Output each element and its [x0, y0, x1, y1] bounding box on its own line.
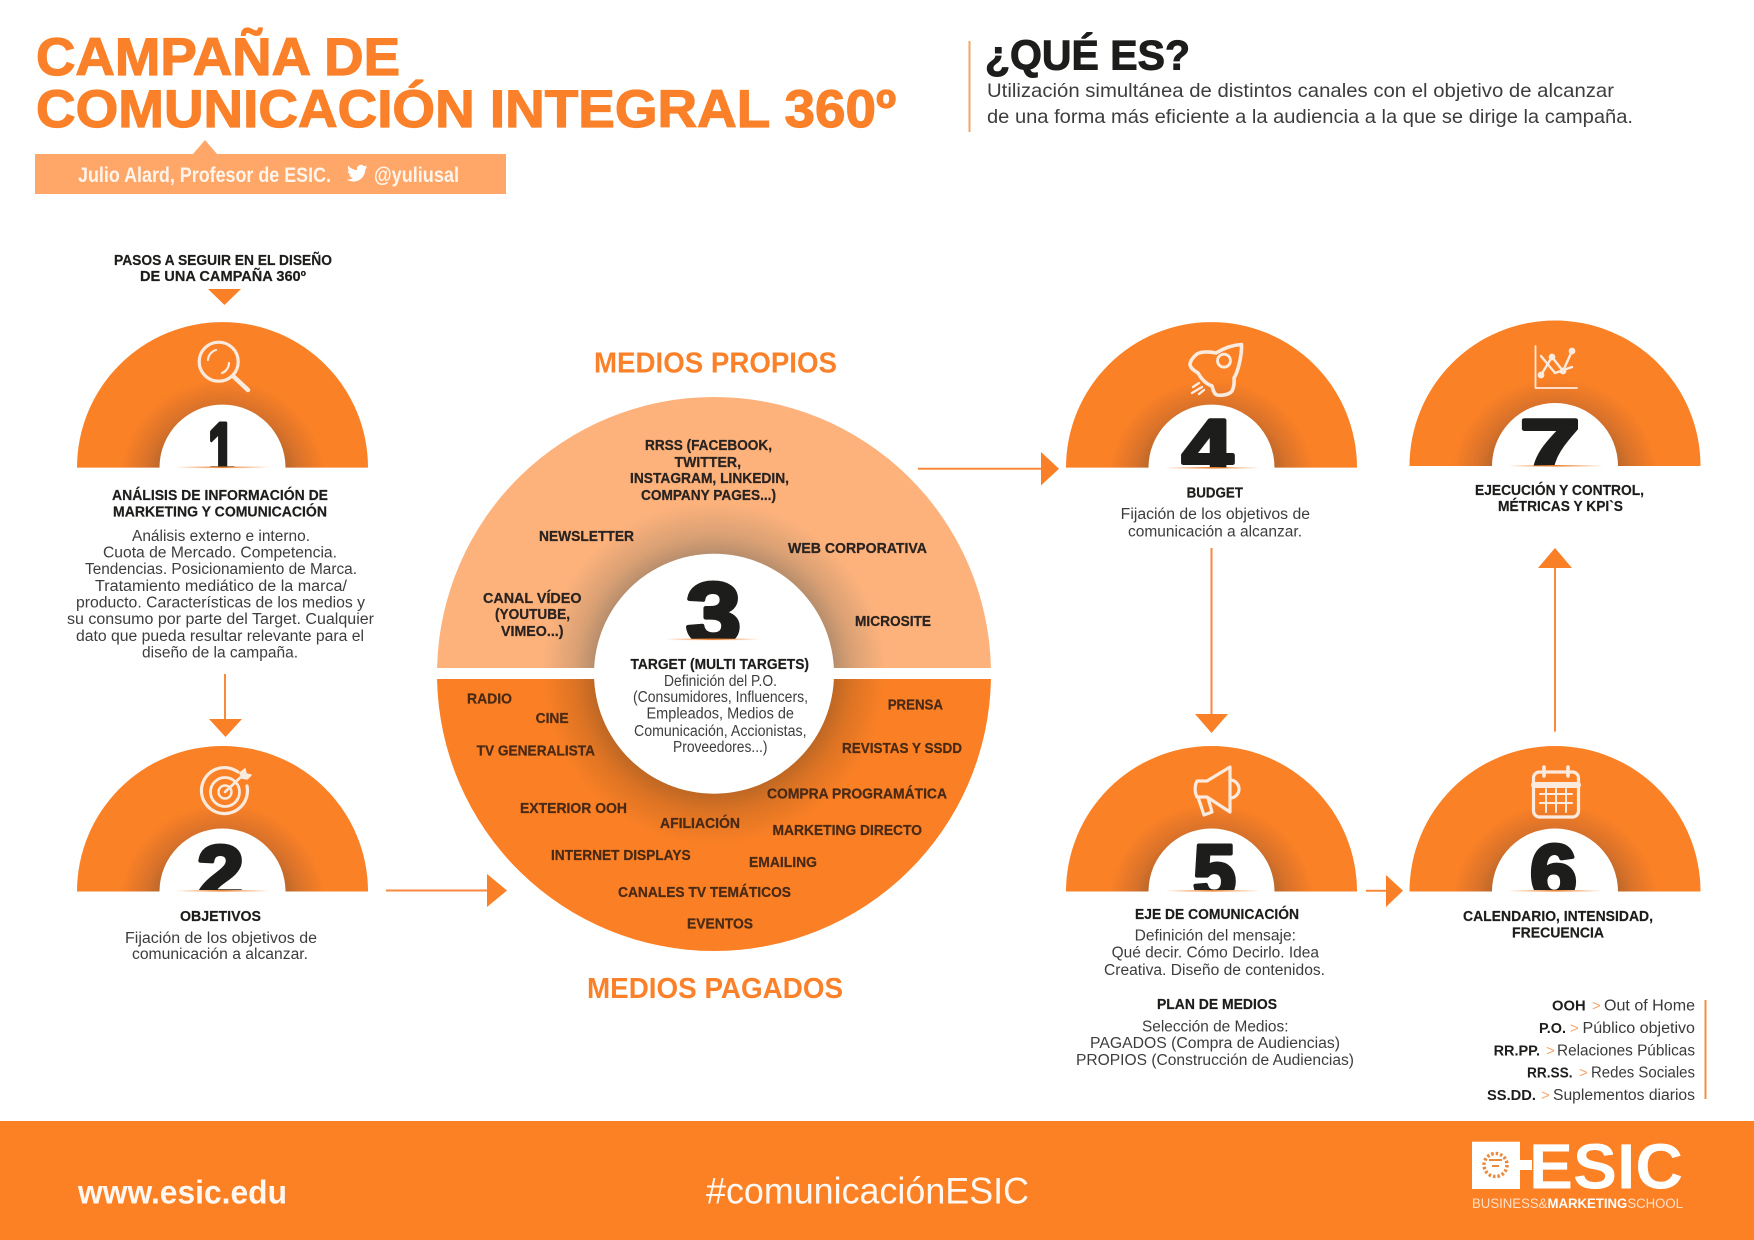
- arch 5: [1066, 746, 1357, 892]
- footer band: [0, 1121, 1754, 1240]
- body 3: Definición del P.O.: [664, 673, 777, 690]
- arch 7: [1410, 320, 1700, 466]
- arch 1: [77, 322, 368, 468]
- glossary legend: P.O.: [1539, 1020, 1566, 1037]
- heading 1: MARKETING Y COMUNICACIÓN: [113, 503, 327, 521]
- icon: line chart: [1536, 346, 1577, 388]
- body 3: Proveedores...): [673, 739, 768, 756]
- heading 2: OBJETIVOS: [180, 909, 261, 925]
- icon: rocket: [1190, 344, 1242, 395]
- hashtag: #comunicaciónESIC: [706, 1171, 1029, 1212]
- step 7: [1410, 320, 1700, 515]
- paid media labels: COMPRA PROGRAMÁTICA: [767, 786, 947, 803]
- paid media labels: EMAILING: [749, 855, 817, 871]
- paid media labels: EXTERIOR OOH: [520, 801, 627, 817]
- icon: megaphone: [1195, 767, 1239, 815]
- arrow 6 to 7: [1538, 548, 1572, 732]
- owned media labels: (YOUTUBE,: [495, 607, 570, 623]
- label: medios pagados: MEDIOS PAGADOS: [587, 973, 843, 1005]
- body 1: Cuota de Mercado. Competencia.: [103, 544, 337, 562]
- arch 4: [1066, 322, 1357, 468]
- arrowhead down: [208, 289, 241, 305]
- owned media labels: INSTAGRAM, LINKEDIN,: [630, 471, 789, 487]
- owned media labels: WEB CORPORATIVA: [788, 541, 928, 557]
- heading 3: TARGET (MULTI TARGETS): [630, 657, 809, 673]
- author banner: Julio Alard, Profesor de ESIC.: [78, 164, 331, 187]
- body 4: [1121, 506, 1310, 541]
- heading 7: EJECUCIÓN Y CONTROL,: [1475, 481, 1644, 499]
- owned media labels: COMPANY PAGES...): [641, 488, 776, 504]
- paid media labels: [467, 692, 962, 933]
- body 2: Fijación de los objetivos de: [125, 930, 317, 947]
- body 1: producto. Características de los medios y: [76, 594, 365, 612]
- main title: [36, 27, 896, 139]
- paid media labels: EVENTOS: [687, 917, 753, 933]
- number 6: 6: [1530, 828, 1577, 916]
- heading 5: EJE DE COMUNICACIÓN: [1135, 905, 1299, 923]
- body 3: [633, 673, 808, 756]
- arrow 2 to 3: [386, 874, 507, 907]
- body 4: comunicación a alcanzar.: [1128, 524, 1302, 541]
- glossary legend: RR.SS.: [1527, 1065, 1573, 1082]
- paid media labels: PRENSA: [888, 698, 943, 714]
- glossary legend: Suplementos diarios: [1553, 1087, 1695, 1104]
- icon: calendar: [1534, 767, 1578, 817]
- number 2: 2: [197, 829, 244, 917]
- body 1: Análisis externo e interno.: [132, 528, 310, 545]
- paid media labels: AFILIACIÓN: [660, 814, 740, 832]
- heading 1: ANÁLISIS DE INFORMACIÓN DE: [112, 486, 328, 504]
- glossary legend: [1487, 998, 1706, 1104]
- heading: qué es: ¿QUÉ ES?: [985, 32, 1190, 78]
- owned media labels: VIMEO...): [501, 624, 564, 640]
- heading 7: [1475, 481, 1644, 515]
- emblem: laurel wreath: [1484, 1154, 1507, 1176]
- icon: target: [201, 768, 251, 814]
- body 5: [1104, 928, 1325, 979]
- arrow 5 to 6: [1366, 875, 1403, 907]
- arch 6: [1410, 746, 1700, 892]
- body 1: diseño de la campaña.: [142, 644, 298, 662]
- number 5: 5: [1193, 828, 1236, 916]
- step 5: [1066, 746, 1357, 1069]
- body 5: Creativa. Diseño de contenidos.: [1104, 962, 1325, 979]
- author banner: [35, 140, 506, 194]
- glossary legend: >: [1546, 1043, 1555, 1060]
- body 1: Tratamiento mediático de la marca/: [95, 578, 348, 595]
- center circle: target: [594, 554, 834, 794]
- body 4: Fijación de los objetivos de: [1121, 506, 1310, 523]
- arrow 4 to 5: [1195, 548, 1228, 733]
- step 4: [1066, 322, 1357, 541]
- owned media labels: CANAL VÍDEO: [483, 590, 582, 607]
- paid media labels: RADIO: [467, 692, 512, 708]
- number 1: 1: [208, 408, 235, 493]
- number 7: 7: [1520, 403, 1580, 491]
- definition text: [987, 80, 1633, 128]
- icon: twitter bird: [347, 165, 367, 181]
- label: medios propios: MEDIOS PROPIOS: [594, 348, 837, 380]
- steps intro: DE UNA CAMPAÑA 360º: [140, 267, 307, 285]
- body 1: Tendencias. Posicionamiento de Marca.: [85, 561, 357, 578]
- definition block: qué es: [968, 32, 1633, 132]
- author banner: @yuliusal: [374, 164, 459, 187]
- body 1: dato que pueda resultar relevante para el: [76, 628, 364, 645]
- body 2: comunicación a alcanzar.: [132, 946, 308, 963]
- body 1: su consumo por parte del Target. Cualquier: [67, 611, 374, 628]
- body 1: [67, 528, 374, 662]
- body 3: Empleados, Medios de: [646, 706, 794, 723]
- paid media labels: CANALES TV TEMÁTICOS: [618, 884, 791, 901]
- logo: esic: BUSINESS&MARKETINGSCHOOL: [1472, 1196, 1683, 1211]
- owned media labels: NEWSLETTER: [539, 529, 634, 545]
- main title: CAMPAÑA DE: [36, 27, 400, 87]
- heading 7: MÉTRICAS Y KPI`S: [1498, 498, 1623, 515]
- glossary legend: >: [1541, 1087, 1550, 1104]
- logo: esic: ESIC: [1529, 1130, 1683, 1202]
- heading 6: [1463, 909, 1653, 942]
- heading: plan de medios: PLAN DE MEDIOS: [1157, 997, 1277, 1013]
- paid media labels: TV GENERALISTA: [477, 744, 595, 760]
- body 3: (Consumidores, Influencers,: [633, 689, 808, 706]
- step 1: [67, 322, 374, 662]
- owned media labels: [483, 438, 931, 640]
- glossary legend: >: [1570, 1020, 1579, 1037]
- arch 2: [77, 746, 368, 892]
- body: plan de medios: PAGADOS (Compra de Audiencias): [1090, 1035, 1340, 1052]
- glossary legend: Redes Sociales: [1591, 1065, 1695, 1082]
- step 2: [77, 746, 368, 963]
- main title: COMUNICACIÓN INTEGRAL 360º: [36, 79, 896, 139]
- panel: paid media half: [437, 679, 991, 951]
- arrow 3 to 4: [918, 452, 1059, 486]
- heading 6: CALENDARIO, INTENSIDAD,: [1463, 909, 1653, 925]
- heading 1: [112, 486, 328, 521]
- step 6: [1410, 746, 1700, 942]
- steps intro: PASOS A SEGUIR EN EL DISEÑO: [114, 251, 332, 269]
- glossary legend: SS.DD.: [1487, 1087, 1536, 1104]
- steps intro: [114, 251, 332, 305]
- number 3: 3: [686, 566, 741, 662]
- heading 4: BUDGET: [1187, 486, 1243, 502]
- owned media labels: TWITTER,: [674, 455, 741, 471]
- heading 6: FRECUENCIA: [1512, 926, 1605, 942]
- panel: owned media half: [437, 397, 991, 668]
- glossary legend: >: [1592, 998, 1601, 1015]
- body 5: Qué decir. Cómo Decirlo. Idea: [1112, 945, 1319, 962]
- website: www.esic.edu: [77, 1174, 287, 1211]
- icon: magnifier: [199, 342, 248, 390]
- glossary legend: >: [1579, 1065, 1588, 1082]
- donut: step 3 media: [437, 397, 991, 951]
- paid media labels: CINE: [536, 711, 569, 727]
- glossary legend: Out of Home: [1604, 998, 1695, 1015]
- logo: esic: [1472, 1130, 1683, 1211]
- glossary legend: Público objetivo: [1582, 1020, 1695, 1037]
- body 2: [125, 930, 317, 963]
- owned media labels: MICROSITE: [855, 614, 931, 630]
- body: plan de medios: [1076, 1019, 1354, 1069]
- body: plan de medios: Selección de Medios:: [1142, 1019, 1288, 1036]
- definition text: Utilización simultánea de distintos canales con el objetivo de alcanzar: [987, 80, 1615, 102]
- body: plan de medios: PROPIOS (Construcción de Audiencias): [1076, 1052, 1354, 1069]
- number 4: 4: [1182, 403, 1233, 491]
- owned media labels: RRSS (FACEBOOK,: [645, 438, 772, 454]
- glossary legend: OOH: [1552, 998, 1586, 1015]
- body 5: Definición del mensaje:: [1135, 928, 1296, 945]
- glossary legend: Relaciones Públicas: [1557, 1043, 1695, 1060]
- paid media labels: MARKETING DIRECTO: [772, 823, 922, 839]
- paid media labels: REVISTAS Y SSDD: [842, 741, 962, 757]
- body 3: Comunicación, Accionistas,: [634, 723, 806, 740]
- arrow 1 to 2: [209, 674, 242, 737]
- paid media labels: INTERNET DISPLAYS: [551, 848, 691, 864]
- glossary legend: RR.PP.: [1494, 1043, 1540, 1060]
- definition text: de una forma más eficiente a la audiencia a la que se dirige la campaña.: [987, 106, 1633, 128]
